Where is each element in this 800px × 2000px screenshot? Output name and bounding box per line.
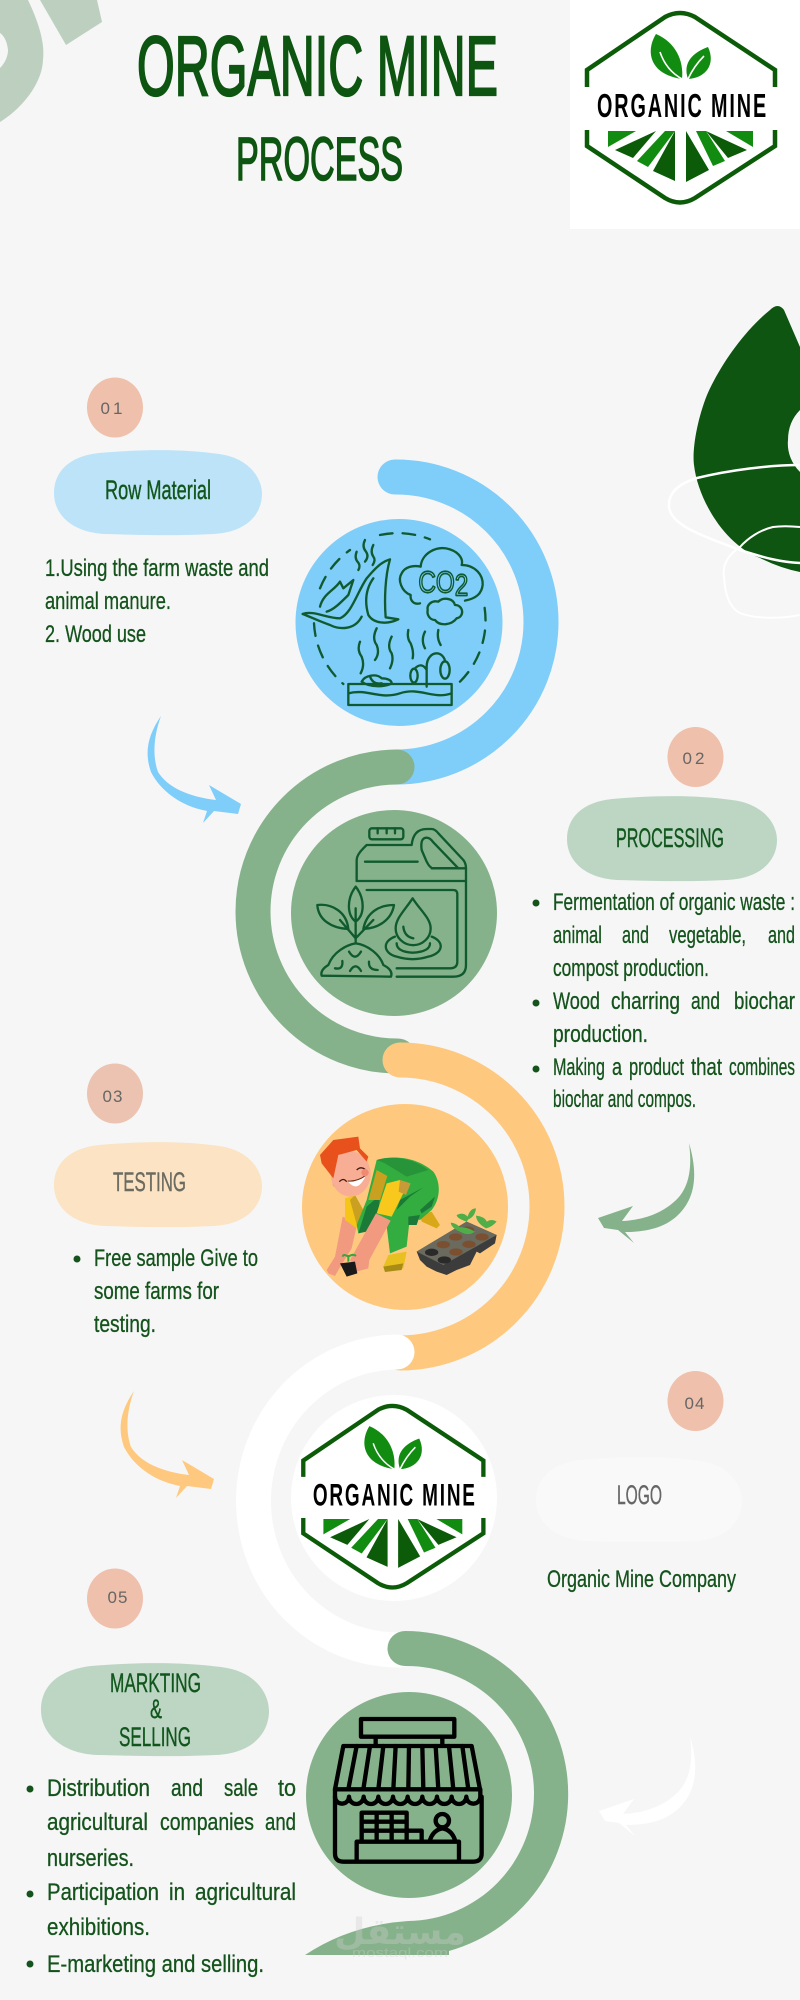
step 05 description: to (278, 1775, 296, 1802)
step 05 description: nurseries. (47, 1845, 134, 1872)
subtitle: PROCESS (236, 125, 403, 193)
step 05 heading pill: & (150, 1694, 162, 1724)
step 02 description: that (691, 1054, 722, 1081)
decoration: top-left leaf bands (0, 0, 102, 122)
step 05 description: and (171, 1775, 203, 1802)
icon: waste and CO2 circle: CO (418, 566, 464, 600)
step 04 heading pill: LOGO (617, 1480, 662, 1510)
step 01 heading pill (54, 450, 262, 535)
step 01 description: animal manure. (45, 588, 171, 615)
step 02 description: product (629, 1054, 684, 1081)
icon: shop circle (306, 1692, 512, 1898)
arrow: blue (148, 716, 241, 823)
step 02 description: compost production. (553, 955, 709, 982)
step 03 heading pill: TESTING (113, 1167, 186, 1197)
step 01 heading pill: Row Material (105, 475, 211, 505)
step 02 description: vegetable, (669, 922, 746, 949)
step 03 description: Free sample Give to (94, 1245, 258, 1272)
step 02 number badge (668, 727, 724, 787)
step 05 description: Distribution (47, 1775, 150, 1802)
step 03 description: some farms for (94, 1278, 219, 1305)
icon: organic mine logo circle: ORGANIC MINE (313, 1476, 475, 1513)
step 02 description: and (622, 922, 649, 949)
step 05 description: E-marketing and selling. (47, 1951, 264, 1978)
step 02 description: charring (611, 988, 680, 1015)
step 05 description: Participation (47, 1879, 159, 1906)
arrow: white (599, 1736, 695, 1836)
step 02 description: production. (553, 1021, 648, 1048)
step 02 description: animal (553, 922, 602, 949)
swirl: blue arc (395, 477, 541, 767)
step 01 description: 1.Using the farm waste and (45, 555, 269, 582)
step 04 heading pill (536, 1457, 742, 1542)
logo panel: top right: ORGANIC MINE (597, 87, 766, 124)
step 05 description: companies (160, 1809, 254, 1836)
decoration: big dark leaf with white loops (669, 306, 800, 618)
step 01 number badge: 01 (101, 399, 125, 418)
icon: jug, plant and soil circle (291, 810, 497, 1016)
step 05 number badge (87, 1568, 143, 1628)
seedling tray (417, 1222, 497, 1275)
step 02 heading pill: PROCESSING (616, 823, 724, 853)
step 01 description (45, 555, 269, 648)
step 05 number badge: 05 (108, 1588, 128, 1607)
step 02 description: Wood (553, 988, 600, 1015)
step 03 number badge (87, 1064, 143, 1124)
step 05 description: and (265, 1809, 296, 1836)
step 05 description: exhibitions. (47, 1914, 150, 1941)
icon: waste and CO2 circle (296, 519, 502, 726)
step 05 heading pill (41, 1663, 269, 1756)
step 05 description: agricultural (47, 1809, 148, 1836)
step 05 description (26, 1775, 296, 1978)
step 01 number badge (87, 378, 143, 438)
step 02 description: and (691, 988, 720, 1015)
arrow: green (598, 1143, 694, 1243)
step 03 number badge: 03 (103, 1087, 123, 1106)
step 05 heading pill: SELLING (119, 1722, 191, 1752)
step 04 number badge: 04 (685, 1394, 705, 1413)
swirl: orange arc (400, 1060, 547, 1353)
step 05 description: sale (224, 1775, 258, 1802)
step 04 description: Organic Mine Company (547, 1566, 736, 1593)
step 03 heading pill (54, 1142, 262, 1227)
logo panel: top right (570, 0, 800, 229)
swirl: white arc (253, 1352, 400, 1650)
step 04 number badge (668, 1371, 724, 1431)
watermark: مستقل (334, 1912, 466, 1953)
step 02 description (532, 889, 795, 1113)
swirl: green arc (253, 767, 398, 1056)
icon: waste and CO2 circle: 2 (455, 568, 468, 602)
arrow: orange (121, 1391, 214, 1498)
step 01 description: 2. Wood use (45, 621, 146, 648)
watermark: mostaql.com (352, 1945, 448, 1960)
swirl: final green arc (305, 1631, 568, 1955)
step 05 description: in (169, 1879, 185, 1906)
title: ORGANIC MINE (137, 19, 498, 113)
step 03 description (74, 1245, 258, 1338)
step 02 description: a (612, 1054, 622, 1081)
step 02 number badge: 02 (683, 749, 707, 768)
step 05 heading pill: MARKTING (110, 1668, 201, 1698)
icon: farmer with seedling tray circle (302, 1104, 508, 1310)
step 02 heading pill (567, 796, 777, 881)
step 03 description: testing. (94, 1311, 156, 1338)
step 02 description: Making (553, 1054, 605, 1081)
step 02 description: biochar and compos. (553, 1086, 696, 1113)
step 05 description: agricultural (195, 1879, 296, 1906)
icon: organic mine logo circle (291, 1395, 497, 1601)
